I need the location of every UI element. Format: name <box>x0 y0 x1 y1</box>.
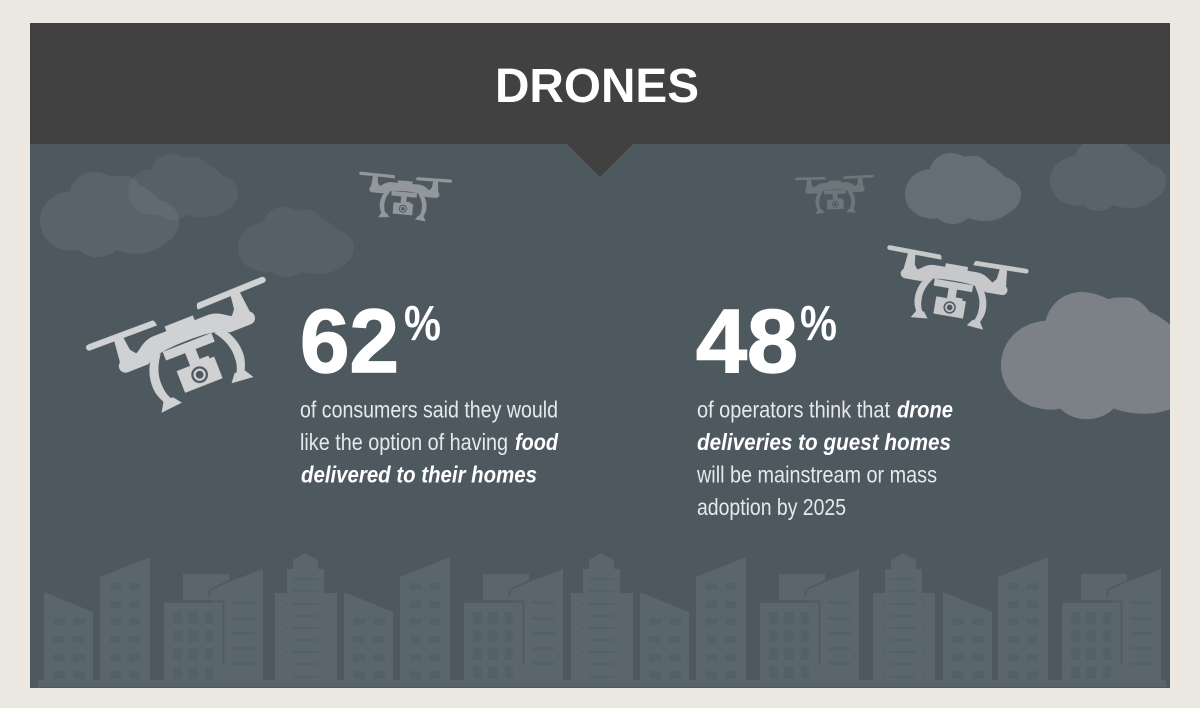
cloud: far left <box>40 172 179 257</box>
cloud: top right <box>905 153 1021 224</box>
text block: operators: deliveries to guest homes <box>697 429 951 455</box>
text block: operators: will be mainstream or mass <box>696 462 937 488</box>
building group: left <box>44 553 337 682</box>
cloud: large right <box>1001 292 1170 420</box>
header band <box>30 23 1170 177</box>
stat: 62 percent: 62 <box>300 292 399 392</box>
sky panel <box>30 144 1170 688</box>
building group: right <box>943 557 1161 682</box>
stat: 62 percent: % <box>404 297 441 351</box>
icon: small drone top left <box>356 172 452 223</box>
icon: small drone top right <box>795 175 875 215</box>
title: DRONES <box>495 60 699 113</box>
building group: centre right <box>640 553 935 682</box>
text block: operators <box>696 396 953 520</box>
icon: medium drone right <box>876 245 1029 335</box>
building group: centre left <box>344 553 633 682</box>
text block: operators: drone <box>897 396 953 422</box>
cloud: far top right <box>1050 140 1166 211</box>
text block: consumers: delivered to their homes <box>301 462 537 488</box>
header pointer <box>567 144 633 177</box>
text block: consumers: food <box>515 429 559 455</box>
text block: consumers: of consumers said they would <box>300 396 558 422</box>
cloud: upper left <box>128 154 238 220</box>
cloud: centre left <box>238 207 354 277</box>
text block: consumers <box>300 396 559 488</box>
stat: 48 percent: % <box>800 297 837 351</box>
clouds <box>40 140 1200 419</box>
cityscape <box>38 553 1166 687</box>
ground strip <box>38 680 1166 687</box>
text block: consumers: like the option of having <box>300 429 508 455</box>
icon: large drone left <box>85 276 297 430</box>
text block: operators: of operators think that <box>697 396 891 422</box>
stat: 48 percent: 48 <box>696 292 798 392</box>
text block: operators: adoption by 2025 <box>697 494 846 520</box>
